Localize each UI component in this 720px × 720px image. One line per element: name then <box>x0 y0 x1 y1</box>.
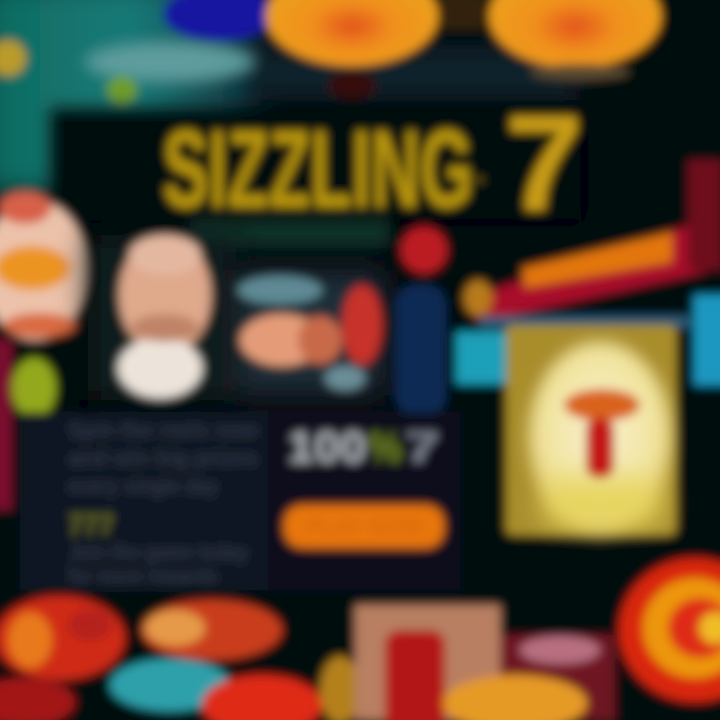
stat text: % <box>368 423 402 472</box>
banner <box>462 160 720 328</box>
stat text <box>288 423 440 472</box>
button <box>284 505 444 548</box>
left clown character <box>0 192 87 510</box>
icon: orange lanterns top <box>266 0 661 99</box>
title text: 7 <box>505 87 583 239</box>
middle figures <box>235 270 385 395</box>
title text: - <box>472 155 485 199</box>
button: PLAY NOW <box>306 514 422 539</box>
panel text: for more rewards <box>68 563 218 590</box>
accent label: 777 <box>68 509 114 542</box>
panel text: Join the game today <box>68 539 249 566</box>
bearded man portrait <box>88 235 236 400</box>
gold card <box>506 325 676 535</box>
cyan accents <box>456 295 720 385</box>
panel text: and win big prizes <box>68 445 258 472</box>
info panel <box>20 412 460 590</box>
panel text: Spin the reels now <box>68 417 258 444</box>
stat text: 100 <box>288 423 366 472</box>
icon: red emblem <box>564 389 640 478</box>
title text: SIZZLING <box>163 107 473 231</box>
icon: orange ring bottom right <box>619 558 720 702</box>
bottom decorations <box>0 596 615 720</box>
panel text <box>68 417 258 590</box>
panel text: every single day <box>68 473 219 500</box>
top scenery <box>0 0 580 195</box>
title panel <box>50 87 583 248</box>
icon: blue shape top <box>163 0 273 41</box>
red ball and blue figure <box>396 227 447 415</box>
stat text: 7 <box>404 423 440 472</box>
